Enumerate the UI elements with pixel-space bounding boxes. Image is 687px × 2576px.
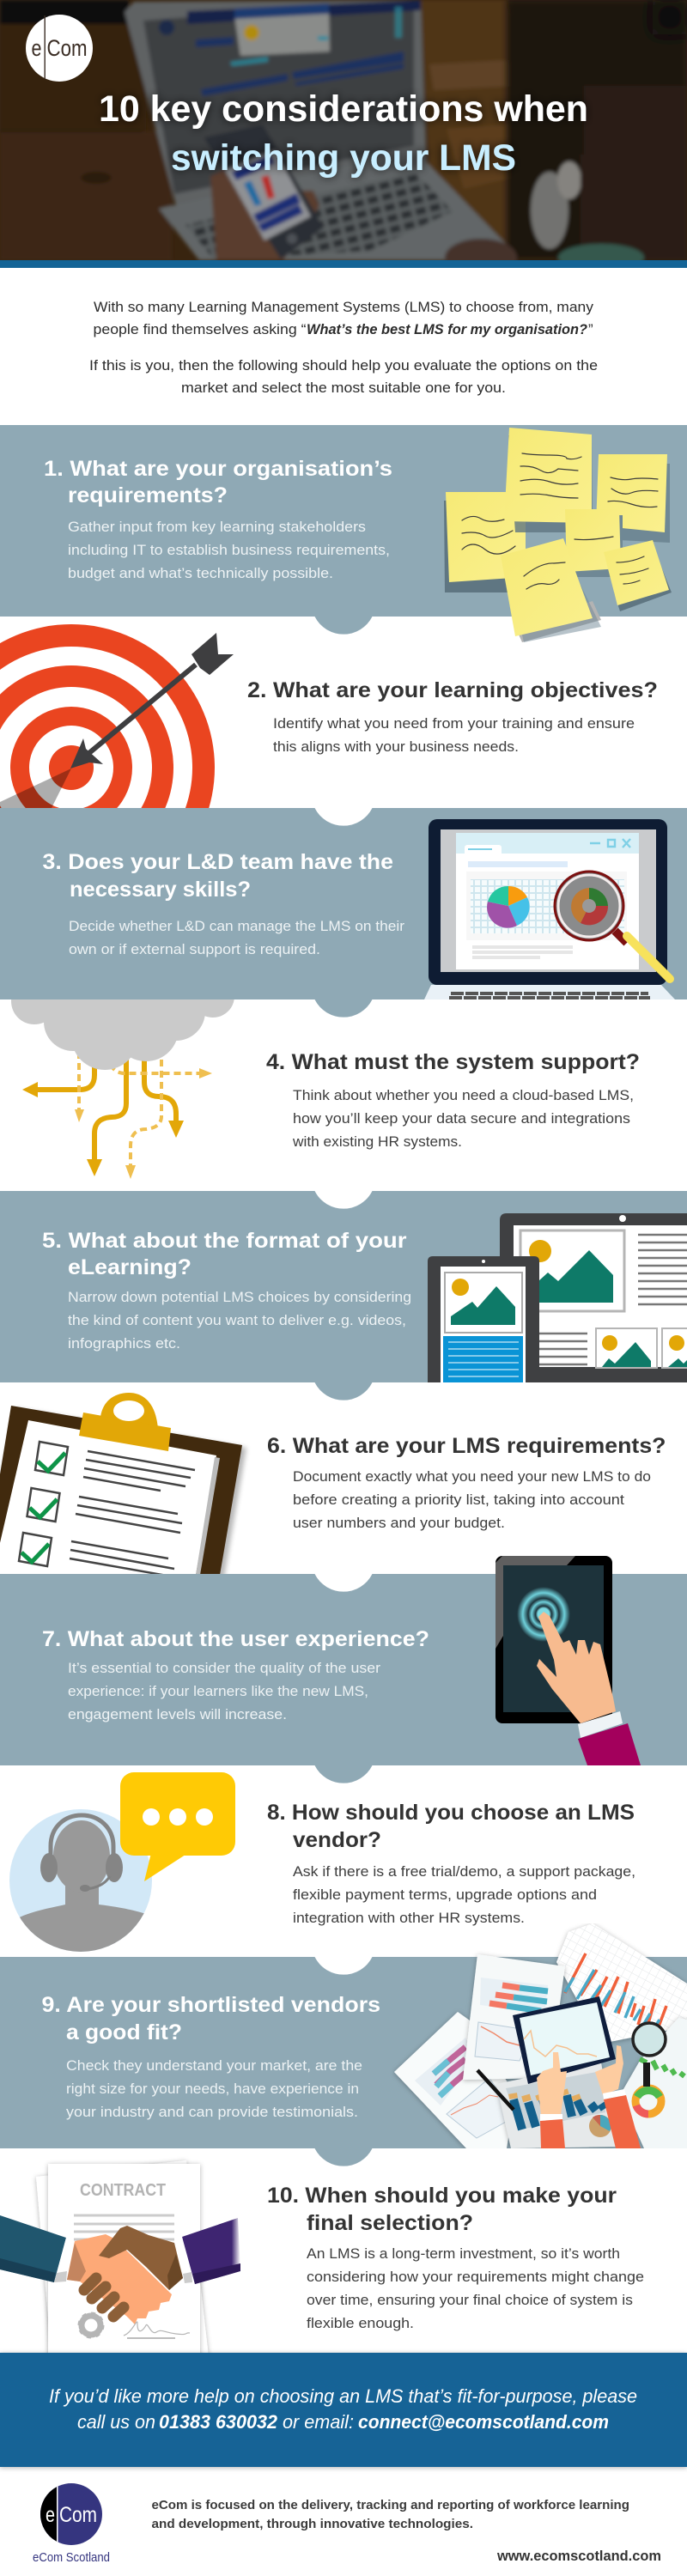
body 9	[66, 2057, 362, 2120]
icon: support agent with speech bubble	[9, 1772, 235, 1958]
body 4: with existing HR systems.	[292, 1133, 462, 1150]
section 6: LMS requirements	[0, 1393, 666, 1583]
body 2	[273, 715, 635, 755]
icon: laptop with magnifier	[424, 819, 675, 999]
title: 10 key considerations when	[99, 88, 588, 130]
hero accent stripe	[0, 260, 687, 268]
heading 9: a good fit?	[66, 2020, 182, 2044]
body 3	[69, 918, 404, 957]
body 6: Document exactly what you need your new LMS to do	[293, 1468, 651, 1485]
heading 3	[43, 850, 393, 902]
intro text: market and select the most suitable one for you.	[181, 380, 506, 396]
body 7: engagement levels will increase.	[68, 1706, 287, 1722]
body 4	[292, 1087, 634, 1150]
heading 10: 10. When should you make your	[267, 2184, 617, 2208]
body 8: flexible payment terms, upgrade options and	[293, 1886, 597, 1903]
body 10: considering how your requirements might change	[307, 2269, 644, 2285]
panel 9 background	[0, 1957, 687, 2166]
section 3: L&D team skills	[43, 819, 675, 999]
logo: eCom white: Com	[46, 35, 88, 61]
heading 8: vendor?	[293, 1828, 381, 1852]
call to action text: call us on	[77, 2411, 155, 2433]
icon: contract and handshake	[0, 2160, 240, 2357]
logo: eCom Scotland footer: eCom Scotland	[33, 2550, 110, 2565]
heading 6: 6. What are your LMS requirements?	[267, 1434, 666, 1458]
section 9: shortlisted vendors	[41, 1923, 687, 2148]
body 8: Ask if there is a free trial/demo, a support package,	[293, 1863, 635, 1880]
heading 10	[267, 2184, 617, 2235]
call to action band	[0, 2353, 687, 2467]
body 8: integration with other HR systems.	[293, 1910, 525, 1926]
heading 8	[267, 1801, 635, 1852]
body 6	[293, 1468, 651, 1531]
logo: eCom Scotland footer: e	[46, 2503, 55, 2527]
heading 5: eLearning?	[68, 1255, 192, 1279]
heading 5	[42, 1229, 407, 1279]
section 7: user experience	[42, 1556, 641, 1765]
body 9: right size for your needs, have experience in	[66, 2081, 359, 2097]
hero banner photo	[0, 0, 687, 276]
call to action text: 01383 630032	[159, 2411, 278, 2433]
panel 7 background	[0, 1574, 687, 1783]
footer description: eCom is focused on the delivery, tracking and reporting of workforce learning	[151, 2498, 629, 2512]
section 8: LMS vendor	[9, 1772, 635, 1958]
title	[99, 88, 588, 179]
body 7	[68, 1660, 380, 1722]
icon: cloud with arrows	[11, 999, 234, 1179]
body 6: user numbers and your budget.	[293, 1515, 505, 1531]
call to action text: connect@ecomscotland.com	[358, 2411, 609, 2433]
intro text: ”	[588, 321, 593, 337]
logo: eCom Scotland footer	[33, 2483, 110, 2565]
heading 3: 3. Does your L&D team have the	[43, 850, 393, 874]
icon: target and arrow	[0, 624, 234, 808]
body 10: An LMS is a long-term investment, so it’s worth	[307, 2245, 620, 2262]
section 1: organisation's requirements	[44, 428, 672, 642]
intro text: What’s the best LMS for my organisation?	[307, 321, 588, 337]
body 10: flexible enough.	[307, 2315, 414, 2331]
body 1	[68, 519, 390, 581]
body 6: before creating a priority list, taking into account	[293, 1492, 624, 1508]
heading 4: 4. What must the system support?	[266, 1050, 640, 1074]
footer description	[151, 2498, 629, 2531]
icon: hand touching tablet	[495, 1556, 641, 1765]
body 7: experience: if your learners like the new LMS,	[68, 1683, 368, 1699]
icon: sticky notes	[444, 428, 672, 642]
intro text: people find themselves asking “	[93, 321, 307, 337]
illustration: charts and tablet	[394, 1923, 687, 2148]
intro text: If this is you, then the following should help you evaluate the options on the	[89, 357, 598, 374]
heading 9	[41, 1993, 380, 2044]
intro text: With so many Learning Management Systems (LMS) to choose from, many	[94, 299, 594, 315]
body 5	[68, 1289, 411, 1352]
body 1: including IT to establish business requirements,	[68, 542, 390, 558]
section 4: system support	[11, 999, 639, 1179]
body 1: budget and what’s technically possible.	[68, 565, 333, 581]
body 5: Narrow down potential LMS choices by considering	[68, 1289, 411, 1305]
heading 1: requirements?	[68, 483, 228, 507]
body 3: Decide whether L&D can manage the LMS on their	[69, 918, 404, 934]
icon: desktop and tablet	[428, 1213, 687, 1387]
section 2: learning objectives	[0, 624, 656, 808]
body 9: your industry and can provide testimonials.	[66, 2104, 358, 2120]
icon: clipboard checklist	[0, 1393, 246, 1583]
call to action text: or email:	[283, 2411, 354, 2433]
panel 3 background	[0, 808, 687, 1018]
body 10	[307, 2245, 644, 2331]
title: switching your LMS	[171, 137, 516, 179]
body 4: Think about whether you need a cloud-based LMS,	[293, 1087, 634, 1103]
heading 10: final selection?	[307, 2211, 473, 2235]
panel 1 background	[0, 425, 687, 635]
panel 5 background	[0, 1191, 687, 1400]
body 8	[293, 1863, 635, 1926]
logo: eCom white: e	[31, 35, 41, 61]
body 1: Gather input from key learning stakeholders	[68, 519, 366, 535]
body 5: the kind of content you want to deliver e.g. videos,	[68, 1312, 406, 1328]
heading 3: necessary skills?	[70, 878, 251, 902]
body 7: It’s essential to consider the quality of the user	[68, 1660, 380, 1676]
body 2: this aligns with your business needs.	[273, 738, 519, 755]
body 4: how you’ll keep your data secure and integrations	[293, 1110, 630, 1127]
icon: contract and handshake: CONTRACT	[80, 2181, 166, 2200]
heading 5: 5. What about the format of your	[42, 1229, 407, 1253]
section 5: eLearning format	[42, 1213, 687, 1387]
heading 7: 7. What about the user experience?	[42, 1627, 429, 1651]
section 10: final selection	[0, 2160, 644, 2357]
body 10: over time, ensuring your final choice of system is	[307, 2292, 633, 2308]
logo: eCom Scotland footer: Com	[59, 2503, 97, 2527]
heading 8: 8. How should you choose an LMS	[267, 1801, 635, 1825]
body 5: infographics etc.	[68, 1335, 180, 1352]
body 3: own or if external support is required.	[69, 941, 320, 957]
heading 1: 1. What are your organisation’s	[44, 457, 392, 481]
logo: eCom white	[26, 15, 93, 82]
heading 2: 2. What are your learning objectives?	[247, 678, 658, 702]
intro text	[89, 299, 598, 396]
call to action text: If you’d like more help on choosing an LMS that’s fit-for-purpose, please	[49, 2385, 637, 2407]
body 9: Check they understand your market, are the	[66, 2057, 362, 2074]
footer description: and development, through innovative technologies.	[151, 2517, 473, 2531]
heading 1	[44, 457, 392, 507]
call to action text	[49, 2385, 637, 2433]
heading 9: 9. Are your shortlisted vendors	[41, 1993, 380, 2017]
body 2: Identify what you need from your training and ensure	[273, 715, 635, 732]
website address: www.ecomscotland.com	[496, 2548, 661, 2564]
